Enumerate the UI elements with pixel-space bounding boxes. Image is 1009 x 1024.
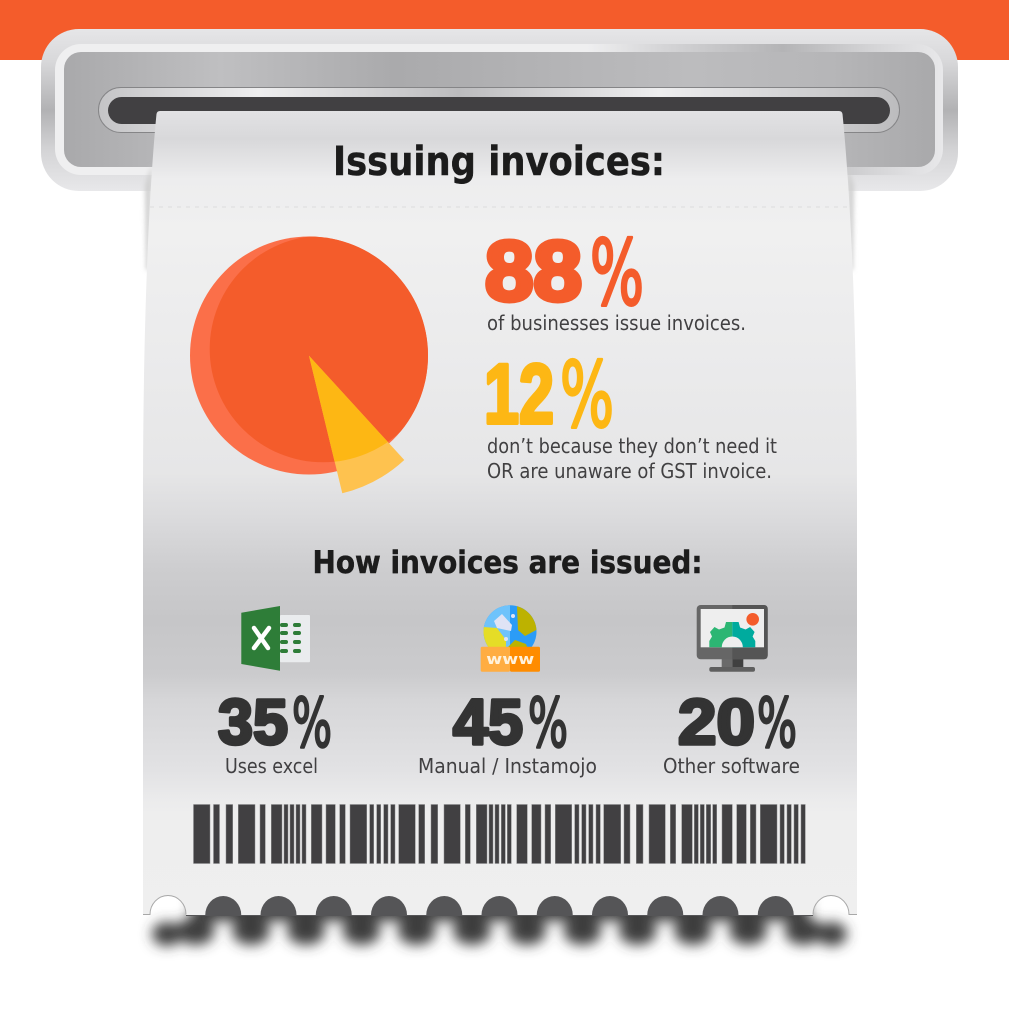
receipt bottom shadow xyxy=(152,896,847,946)
slot grey plate xyxy=(64,52,935,167)
icon: website xyxy=(481,605,540,672)
stat: 35 percent uses excel xyxy=(218,684,332,778)
pie outer disc xyxy=(190,236,428,474)
stat: 12 percent: % xyxy=(560,343,614,448)
slot opening ring xyxy=(98,88,900,132)
orange header band xyxy=(0,0,1009,60)
stat: 20 percent other software xyxy=(663,684,800,778)
stat: 20 percent other software: 20 xyxy=(678,686,755,758)
receipt side shadows xyxy=(145,165,854,270)
perforation line xyxy=(150,206,850,208)
icon: excel xyxy=(241,606,310,671)
receipt paper xyxy=(143,111,857,915)
pie wedge 12 percent extended xyxy=(309,356,404,493)
stat: 45 percent manual: % xyxy=(528,684,568,764)
stat: 12 percent xyxy=(484,343,777,483)
stat: 88 percent: 88 xyxy=(485,224,582,318)
stat: 20 percent other software: % xyxy=(757,684,797,764)
stat: 12 percent: OR are unaware of GST invoice. xyxy=(487,459,772,483)
stat: 35 percent uses excel: Uses excel xyxy=(225,754,318,778)
section heading: How invoices are issued: xyxy=(312,545,702,581)
stat: 45 percent manual: Manual / Instamojo xyxy=(418,754,597,778)
dark band behind scallops xyxy=(186,893,813,916)
title: Issuing invoices: xyxy=(333,139,665,185)
stat: 35 percent uses excel: % xyxy=(292,684,332,764)
icon: software monitor xyxy=(697,605,768,672)
slot opening xyxy=(108,97,890,124)
stat: 88 percent: of businesses issue invoices. xyxy=(487,311,746,335)
barcode xyxy=(194,804,805,864)
stat: 88 percent: % xyxy=(590,221,644,326)
stat: 35 percent uses excel: 35 xyxy=(218,686,288,758)
stat: 12 percent: don’t because they don’t need it xyxy=(487,434,777,458)
pie wedge 12 percent xyxy=(309,356,388,462)
stat: 45 percent manual: 45 xyxy=(453,686,523,758)
stat: 20 percent other software: Other software xyxy=(663,754,800,778)
pie chart xyxy=(190,236,436,493)
stat: 88 percent xyxy=(485,221,746,335)
icon: website: www xyxy=(486,652,534,668)
stat: 12 percent: 12 xyxy=(484,347,554,441)
invoice slot machine xyxy=(41,29,958,191)
stat: 45 percent manual xyxy=(418,684,597,778)
slot outer frame xyxy=(41,29,958,191)
slot inner rim xyxy=(55,44,943,175)
end scallop outlines xyxy=(143,896,857,914)
pie main face xyxy=(210,236,436,462)
